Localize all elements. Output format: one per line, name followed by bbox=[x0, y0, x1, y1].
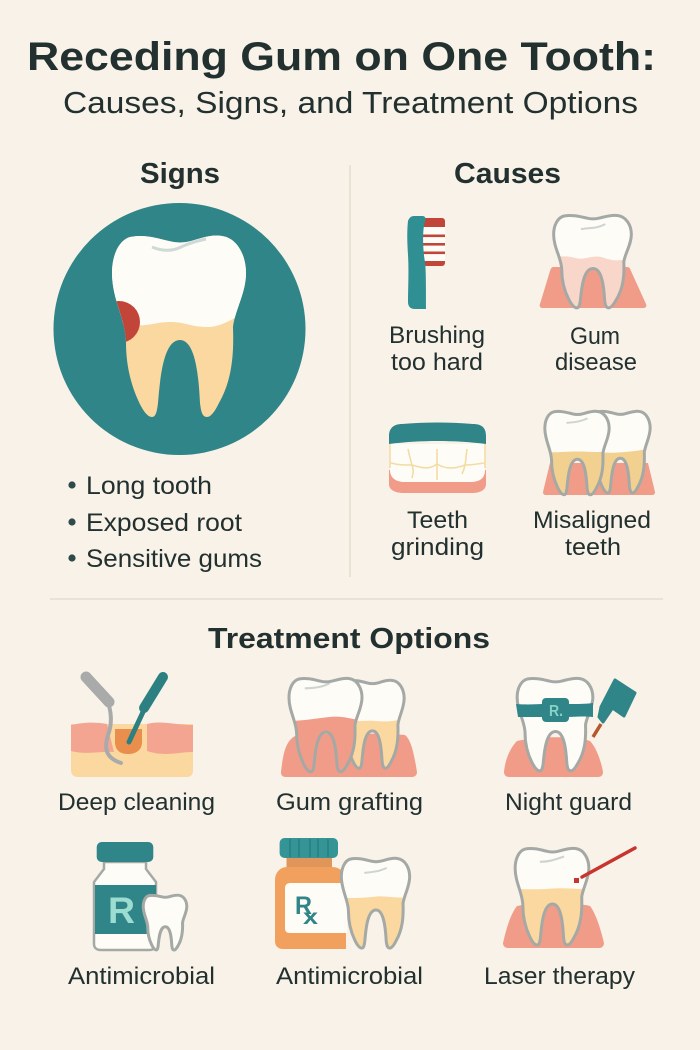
label: antimicrobial: Antimicrobial bbox=[68, 963, 215, 990]
panel: signs bbox=[54, 158, 306, 573]
label: misaligned teeth bbox=[533, 507, 651, 561]
icon: toothbrush bbox=[407, 216, 445, 309]
icon: prescription bottle with tooth: x bbox=[303, 906, 318, 929]
icon: night guard: R. bbox=[549, 703, 563, 720]
panel: treatment options bbox=[58, 623, 635, 990]
label: brushing too hard: Brushing bbox=[389, 322, 485, 349]
icon: teeth grinding bbox=[389, 422, 486, 493]
heading: treatment options: Treatment Options bbox=[208, 623, 490, 655]
label: misaligned teeth: teeth bbox=[565, 534, 621, 561]
icon: gum grafting bbox=[281, 673, 417, 777]
icon: misaligned teeth bbox=[539, 406, 656, 495]
icon: prescription bottle with tooth: R bbox=[295, 892, 312, 920]
panel: causes bbox=[389, 158, 656, 561]
icon: gum disease tooth bbox=[540, 210, 646, 308]
title bbox=[27, 35, 656, 120]
label: laser therapy: Laser therapy bbox=[484, 963, 635, 990]
icon: night guard bbox=[504, 678, 635, 777]
list of signs: Exposed root bbox=[86, 509, 242, 537]
list of signs bbox=[68, 472, 262, 573]
heading: signs: Signs bbox=[140, 158, 220, 190]
label: gum disease: disease bbox=[555, 349, 637, 376]
label: antimicrobial: Antimicrobial bbox=[276, 963, 423, 990]
label: night guard: Night guard bbox=[505, 789, 632, 816]
list of signs: Sensitive gums bbox=[86, 545, 262, 573]
label: deep cleaning: Deep cleaning bbox=[58, 789, 215, 816]
heading: causes: Causes bbox=[454, 158, 561, 190]
label: gum disease bbox=[555, 323, 637, 376]
title: Causes, Signs, and Treatment Options bbox=[63, 85, 638, 120]
label: teeth grinding: Teeth bbox=[407, 507, 468, 534]
label: gum grafting: Gum grafting bbox=[276, 789, 423, 816]
icon: tooth with receding gum in teal circle bbox=[54, 203, 306, 455]
icon: deep cleaning bbox=[71, 677, 193, 777]
label: gum disease: Gum bbox=[570, 323, 620, 350]
label: misaligned teeth: Misaligned bbox=[533, 507, 651, 534]
label: brushing too hard bbox=[389, 322, 485, 376]
label: teeth grinding bbox=[391, 507, 484, 561]
label: brushing too hard: too hard bbox=[391, 349, 483, 376]
title: Receding Gum on One Tooth: bbox=[27, 35, 656, 79]
icon: antimicrobial bottle with tooth: R bbox=[108, 890, 135, 931]
list of signs: Long tooth bbox=[86, 472, 212, 500]
label: teeth grinding: grinding bbox=[391, 534, 484, 561]
icon: laser therapy bbox=[503, 843, 635, 948]
icon: antimicrobial bottle with tooth bbox=[94, 842, 187, 950]
icon: prescription bottle with tooth bbox=[275, 838, 416, 949]
